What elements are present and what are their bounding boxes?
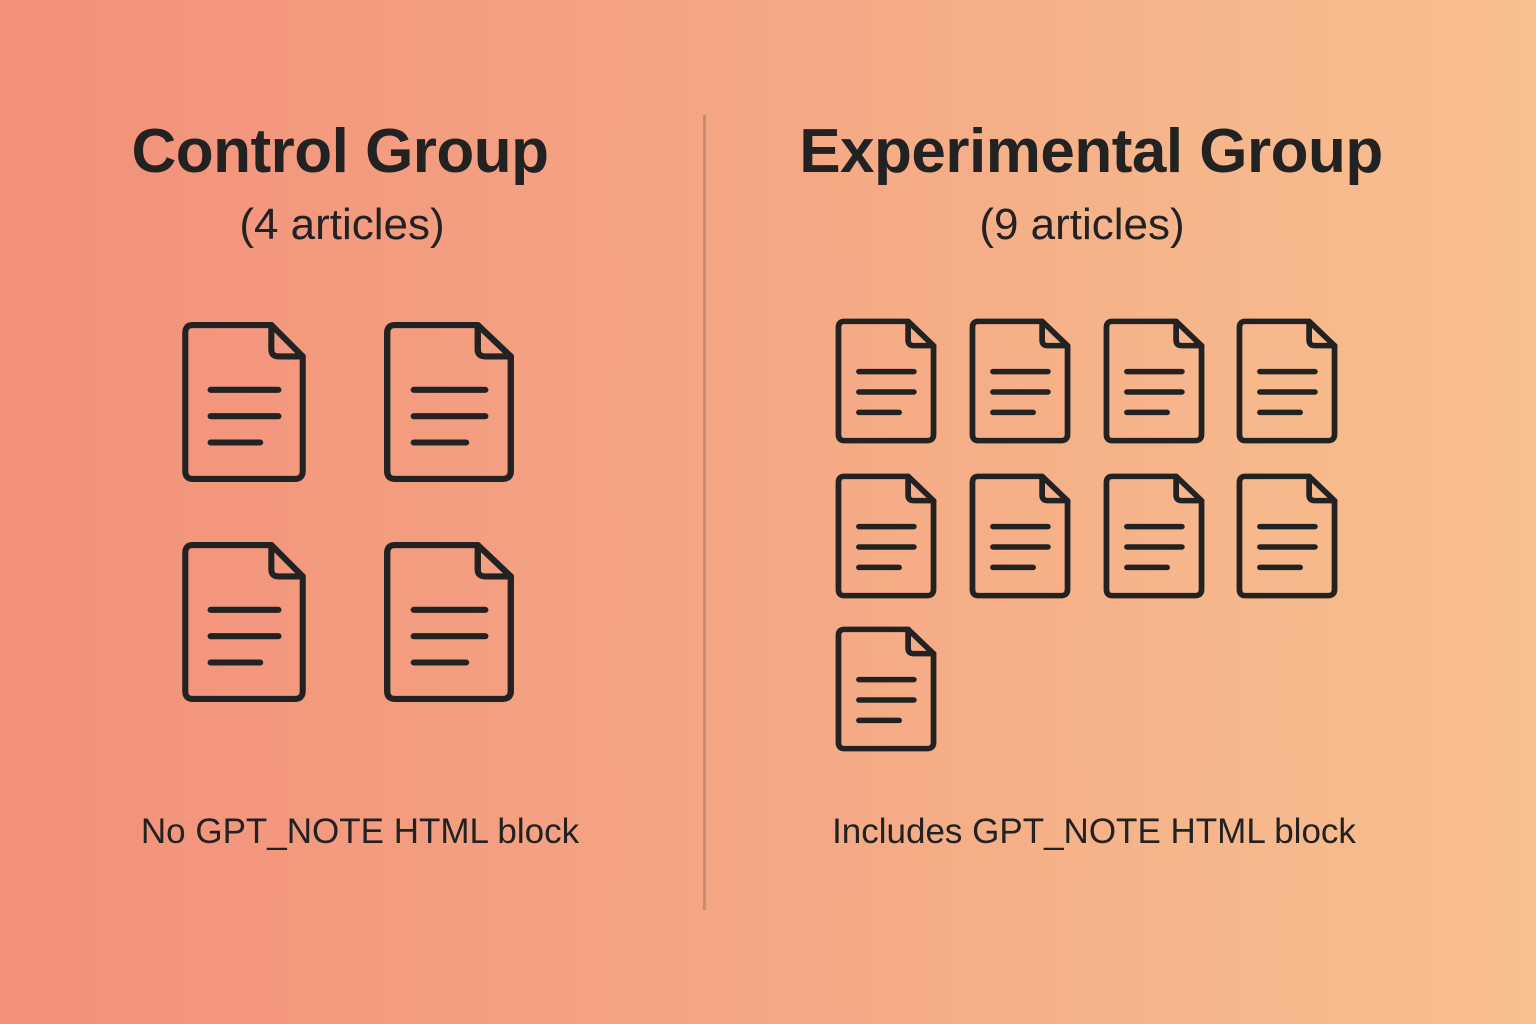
- icon grid: control documents: [182, 322, 514, 702]
- icon: doc 7: [1104, 474, 1204, 598]
- icon: doc 4: [1236, 318, 1338, 444]
- icon: doc 5: [836, 474, 936, 598]
- title: control group: Control Group: [131, 117, 549, 186]
- icon: document 1: [182, 322, 306, 482]
- icon: document 3: [182, 542, 306, 702]
- caption: experimental: Includes GPT_NOTE HTML block: [832, 812, 1356, 851]
- caption: control: No GPT_NOTE HTML block: [141, 812, 579, 851]
- icon: document 4: [384, 542, 514, 702]
- icon grid: experimental documents: [836, 318, 1338, 752]
- icon: doc 1: [836, 318, 936, 444]
- divider: [703, 115, 706, 910]
- subtitle: 4 articles: (4 articles): [239, 200, 445, 249]
- icon: doc 8: [1236, 474, 1338, 598]
- icon: document 2: [384, 322, 514, 482]
- icon: doc 3: [1104, 318, 1204, 444]
- subtitle: 9 articles: (9 articles): [979, 200, 1185, 249]
- icon: doc 9: [836, 626, 936, 752]
- title: experimental group: Experimental Group: [799, 117, 1383, 186]
- icon: doc 2: [970, 318, 1070, 444]
- icon: doc 6: [970, 474, 1070, 598]
